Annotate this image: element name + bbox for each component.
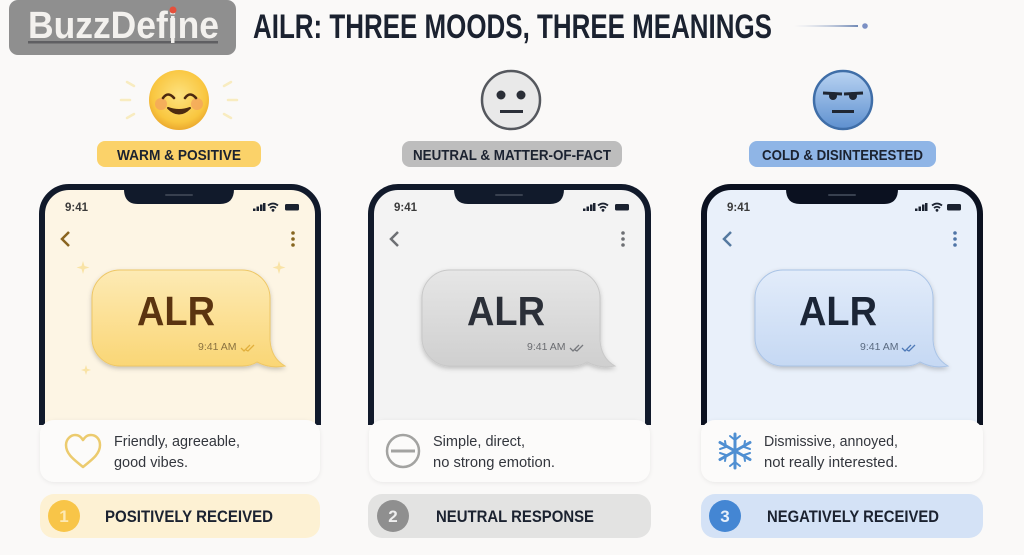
speech bubble: ALR warm	[92, 270, 285, 367]
phone: cold: 9:41	[727, 202, 751, 214]
outcome bar: positively received	[40, 494, 320, 538]
info card: neutral meaning: Simple, direct,	[433, 433, 525, 450]
speech bubble: ALR neutral	[422, 270, 615, 367]
info card: warm meaning	[40, 420, 320, 482]
phone: cold	[704, 185, 980, 425]
speech bubble: ALR cold	[755, 270, 948, 367]
phone: neutral: 9:41	[394, 202, 418, 214]
panel: warm and positive	[40, 70, 320, 538]
logo: BuzzDefine: BuzzDefine	[28, 5, 219, 47]
outcome bar: positively received: 1	[59, 507, 69, 526]
mood label: warm and positive: WARM & POSITIVE	[117, 147, 241, 164]
phone: neutral	[371, 185, 648, 425]
icon: smiling emoji with sun rays	[121, 70, 237, 130]
icon: snowflake	[720, 434, 750, 468]
icon: neutral face	[482, 71, 540, 129]
outcome bar: neutral response	[368, 494, 651, 538]
speech bubble: ALR warm: 9:41 AM	[198, 341, 237, 353]
title: AILR: THREE MOODS, THREE MEANINGS	[253, 8, 772, 46]
decorative title accent	[794, 23, 868, 29]
outcome bar: neutral response: 2	[388, 507, 398, 526]
mood label: neutral	[402, 141, 622, 167]
panel: cold and disinterested	[701, 71, 983, 538]
mood label: cold: COLD & DISINTERESTED	[762, 147, 923, 164]
mood label: cold	[749, 141, 936, 167]
info card: cold meaning: not really interested.	[764, 454, 898, 471]
icon: minus circle	[387, 435, 419, 467]
speech bubble: ALR cold: 9:41 AM	[860, 341, 899, 353]
info card: warm meaning: Friendly, agreeable,	[114, 433, 240, 450]
phone: warm: 9:41	[65, 202, 89, 214]
outcome bar: negatively received: 3	[720, 507, 730, 526]
logo: BuzzDefine	[9, 0, 236, 55]
info card: cold meaning: Dismissive, annoyed,	[764, 433, 898, 450]
speech bubble: ALR neutral: ALR	[467, 288, 545, 334]
speech bubble: ALR neutral: 9:41 AM	[527, 341, 566, 353]
outcome bar: negatively received: NEGATIVELY RECEIVED	[767, 507, 939, 526]
info card: neutral meaning	[369, 420, 650, 482]
outcome bar: neutral response: NEUTRAL RESPONSE	[436, 507, 594, 526]
mood label: warm and positive	[97, 141, 261, 167]
icon: heart	[66, 435, 100, 467]
panel: neutral and matter-of-fact	[368, 71, 651, 538]
mood label: neutral: NEUTRAL & MATTER-OF-FACT	[413, 147, 611, 164]
speech bubble: ALR warm: ALR	[137, 288, 215, 334]
speech bubble: ALR cold: ALR	[799, 288, 877, 334]
outcome bar: negatively received	[701, 494, 983, 538]
phone: warm	[42, 185, 318, 425]
icon: unamused blue face	[814, 71, 872, 129]
info card: warm meaning: good vibes.	[114, 454, 188, 471]
info card: neutral meaning: no strong emotion.	[433, 454, 555, 471]
info card: cold meaning	[701, 420, 983, 482]
outcome bar: positively received: POSITIVELY RECEIVED	[105, 507, 273, 526]
